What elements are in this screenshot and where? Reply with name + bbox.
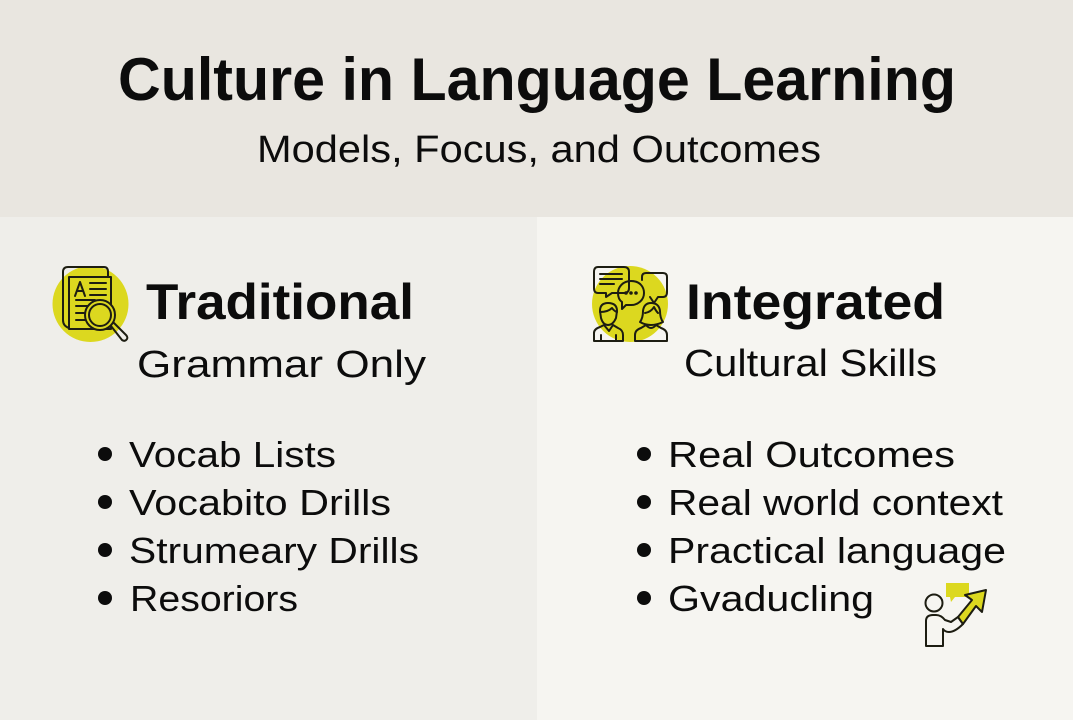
- bullet list: traditional: Resoriors: [130, 578, 298, 619]
- bullet list: integrated: Practical language: [668, 530, 1006, 571]
- panel: integrated: [537, 217, 1073, 720]
- heading: integrated: Integrated: [686, 274, 945, 330]
- bullet list: traditional: Vocabito Drills: [129, 482, 391, 523]
- subheading: grammar only: Grammar Only: [137, 344, 426, 386]
- bullet list: traditional: [98, 434, 419, 619]
- icon: people in conversation: [592, 266, 668, 342]
- bullet list: traditional: Strumeary Drills: [129, 530, 419, 571]
- panel: traditional: [0, 217, 537, 720]
- icon: document with magnifier: [52, 266, 128, 342]
- heading: traditional: Traditional: [146, 274, 414, 330]
- title: Culture in Language Learning: [118, 46, 956, 113]
- bullet list: integrated: [637, 434, 1006, 619]
- subheading: cultural skills: Cultural Skills: [684, 343, 937, 385]
- bullet list: integrated: Real Outcomes: [668, 434, 955, 475]
- bullet list: integrated: Gvaducling: [668, 578, 874, 619]
- bullet list: integrated: Real world context: [668, 482, 1003, 523]
- icon: person presenting growth arrow: [926, 583, 986, 646]
- subtitle: Models, Focus, and Outcomes: [257, 129, 821, 171]
- bullet list: traditional: Vocab Lists: [129, 434, 336, 475]
